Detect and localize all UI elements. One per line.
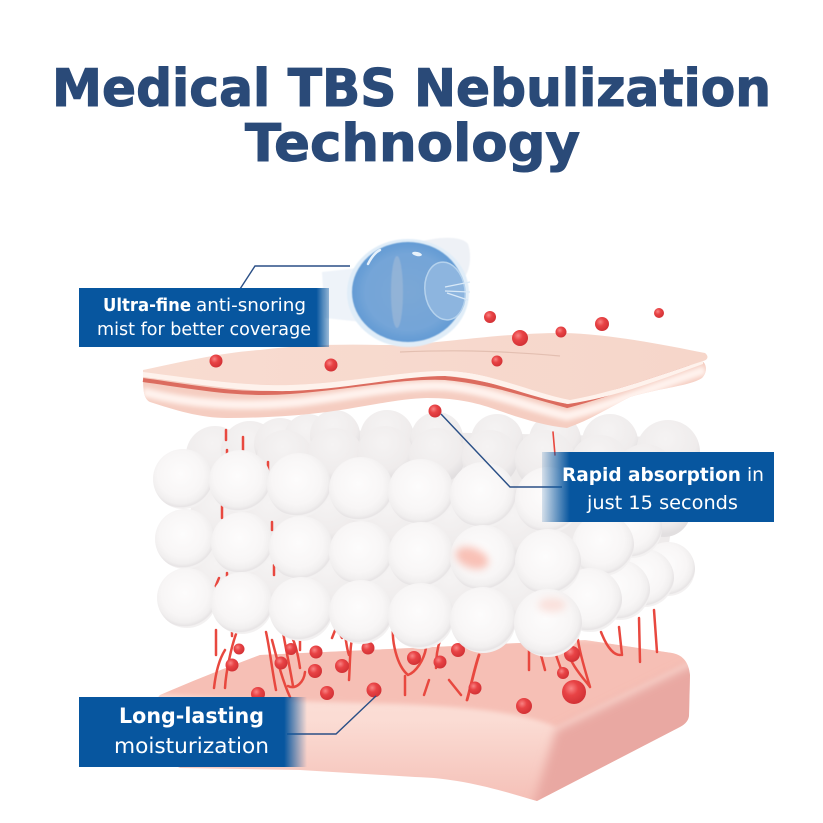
callout: rapid absorption: in (747, 464, 764, 486)
callout: long-lasting moisturization: moisturization (114, 734, 269, 758)
title (52, 59, 771, 174)
lower red droplets (226, 642, 586, 714)
callout: rapid absorption (542, 452, 774, 522)
upper skin sheet (135, 333, 715, 435)
callout: ultra-fine mist (79, 288, 329, 347)
front spheres (153, 449, 582, 657)
icon: nebulizer capsule (322, 238, 470, 347)
title: Technology (245, 114, 580, 174)
callout: ultra-fine mist: anti-snoring (196, 295, 306, 316)
back spheres (186, 410, 700, 632)
callout: long-lasting moisturization (79, 697, 307, 767)
title: Medical TBS Nebulization (52, 59, 771, 119)
red vessels (213, 430, 657, 700)
callout: rapid absorption: just 15 seconds (586, 492, 738, 514)
callout: long-lasting moisturization: Long-lasting (119, 704, 264, 728)
upper red droplets (210, 308, 664, 418)
bottom skin block (158, 640, 690, 801)
callout: ultra-fine mist: mist for better coverage (97, 319, 311, 340)
callout: ultra-fine mist: Ultra-fine (103, 295, 191, 316)
callout: rapid absorption: Rapid absorption (562, 464, 741, 486)
leader lines (240, 266, 562, 734)
